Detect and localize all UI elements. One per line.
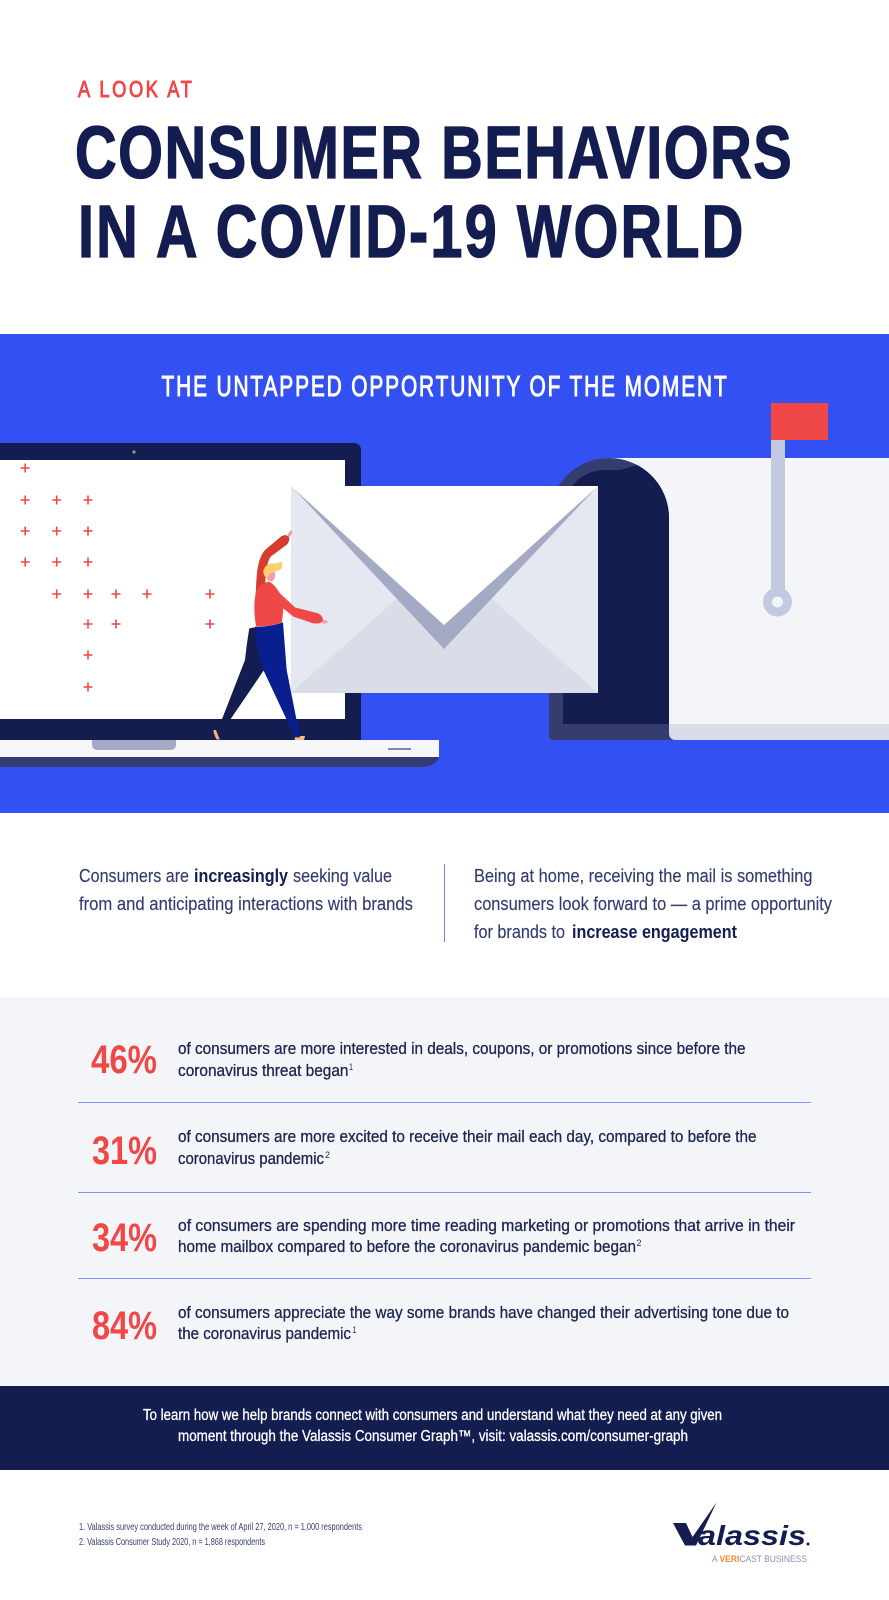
text block: intro left: increasingly	[194, 865, 289, 886]
text block: intro right: consumers look forward to — a prime opportunity	[474, 893, 833, 914]
logo tagline: A VERICAST BUSINESS	[712, 1554, 807, 1565]
title: CONSUMER BEHAVIORS	[75, 112, 792, 195]
title: IN A COVID-19 WORLD	[78, 191, 743, 274]
logo: Valassis: alassis	[698, 1520, 806, 1551]
text block: intro right: for brands to	[474, 921, 565, 942]
text block: intro left	[79, 865, 413, 914]
panel: hero illustration	[0, 334, 889, 813]
title	[75, 112, 792, 274]
stat: 34%: 2	[636, 1238, 642, 1248]
footnotes: 1. Valassis survey conducted during the week of April 27, 2020, n = 1,000 respondents	[79, 1521, 362, 1533]
stat: 46%: 46%	[91, 1038, 157, 1082]
icon: laptop	[0, 443, 439, 767]
stat: 84%: the coronavirus pandemic	[178, 1324, 351, 1343]
panel: call to action: To learn how we help brands connect with consumers and understand what they need at any given	[143, 1407, 722, 1424]
stat: 84%	[92, 1303, 789, 1348]
text block: intro left: Consumers are	[79, 865, 189, 886]
eyebrow heading: A LOOK AT	[78, 77, 192, 103]
stat: 46%	[91, 1038, 746, 1082]
icon: envelope	[291, 486, 598, 693]
text block: intro right: increase engagement	[572, 921, 737, 942]
stat: 34%: home mailbox compared to before the coronavirus pandemic began	[178, 1237, 636, 1256]
plus pattern on screen	[21, 464, 215, 692]
stat: 84%: 1	[352, 1325, 356, 1335]
stat: 34%: 34%	[92, 1216, 157, 1260]
stat: 31%: coronavirus pandemic	[178, 1149, 324, 1168]
figure: person pushing the envelope	[213, 529, 329, 740]
stat: 31%: 31%	[92, 1129, 157, 1173]
footnotes	[79, 1521, 362, 1548]
text block: intro right: Being at home, receiving the mail is something	[474, 865, 812, 886]
stat: 31%: 2	[325, 1150, 330, 1160]
text block: intro left: seeking value	[293, 865, 392, 886]
stat: 46%: coronavirus threat began	[178, 1061, 348, 1080]
stat: 34%	[92, 1216, 795, 1260]
stat: 84%: of consumers appreciate the way some brands have changed their advertising tone due to	[178, 1303, 789, 1322]
stat: 46%: 1	[349, 1062, 353, 1072]
stat: 46%: of consumers are more interested in deals, coupons, or promotions since before the	[178, 1039, 746, 1058]
panel: call to action	[0, 1386, 889, 1470]
stat: 84%: 84%	[92, 1304, 157, 1348]
logo: Valassis	[673, 1502, 810, 1565]
mailbox flag	[768, 403, 828, 612]
text block: intro right	[474, 865, 833, 942]
stat: 34%: of consumers are spending more time reading marketing or promotions that arrive in their	[178, 1216, 795, 1235]
panel: call to action: moment through the Valassis Consumer Graph™, visit: valassis.com/consumer-graph	[178, 1428, 688, 1445]
stat: 31%	[92, 1127, 756, 1173]
icon: mailbox	[549, 403, 889, 740]
text block: intro left: from and anticipating interactions with brands	[79, 893, 413, 914]
panel: statistics	[0, 997, 889, 1386]
hero heading: THE UNTAPPED OPPORTUNITY OF THE MOMENT	[162, 371, 727, 403]
stat: 31%: of consumers are more excited to receive their mail each day, compared to before the	[178, 1127, 756, 1146]
footnotes: 2. Valassis Consumer Study 2020, n = 1,868 respondents	[79, 1536, 265, 1548]
